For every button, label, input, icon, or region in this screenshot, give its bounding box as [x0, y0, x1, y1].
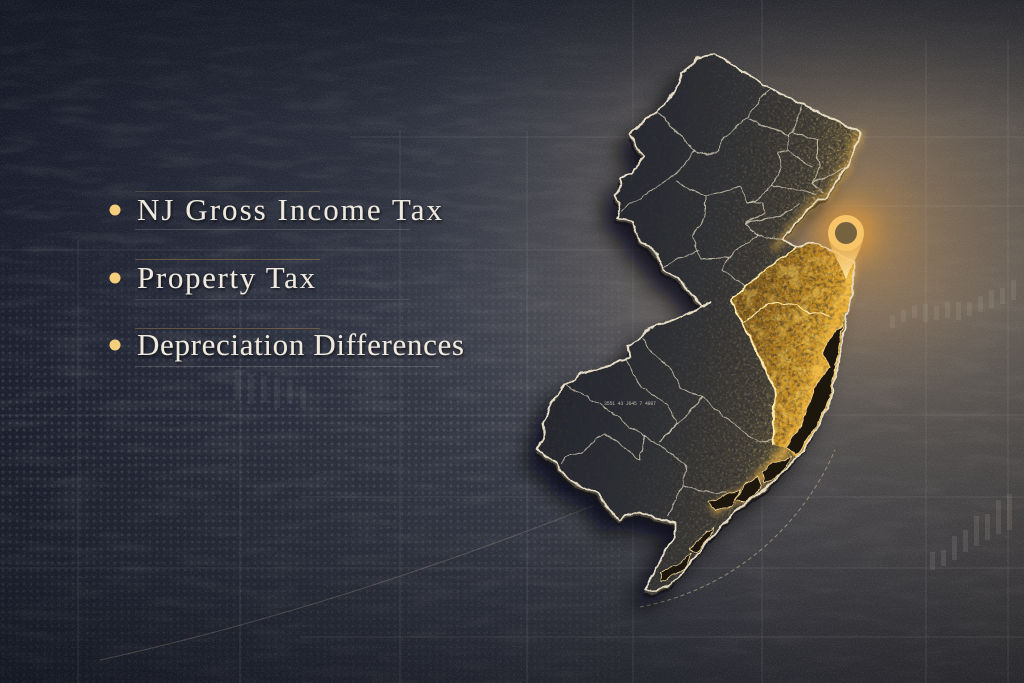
- land surface: [530, 40, 870, 600]
- county boundaries: [563, 88, 847, 517]
- list item: Depreciation Differences: Depreciation Differences: [137, 327, 464, 362]
- bullet list: [110, 192, 464, 366]
- location pin: [816, 203, 876, 280]
- trend curves: [100, 450, 835, 660]
- coastal glow: [715, 132, 860, 508]
- map extruded edge: [534, 57, 859, 598]
- barrier lagoon: [660, 325, 842, 582]
- highlighted region boundaries: [730, 247, 830, 445]
- small map caption: 3551 43 J045 7 4987: [604, 401, 656, 407]
- list item: NJ Gross Income Tax: NJ Gross Income Tax: [137, 192, 442, 227]
- state outline: [536, 54, 860, 592]
- faint rising bar chart: [235, 280, 1016, 570]
- map body with organic edges: [530, 40, 870, 600]
- map cast shadow: [522, 70, 846, 608]
- list item: Property Tax: [110, 260, 410, 300]
- list item: Property Tax: Property Tax: [137, 260, 316, 295]
- highlighted coastal region: [732, 244, 854, 457]
- map of New Jersey: [522, 40, 870, 608]
